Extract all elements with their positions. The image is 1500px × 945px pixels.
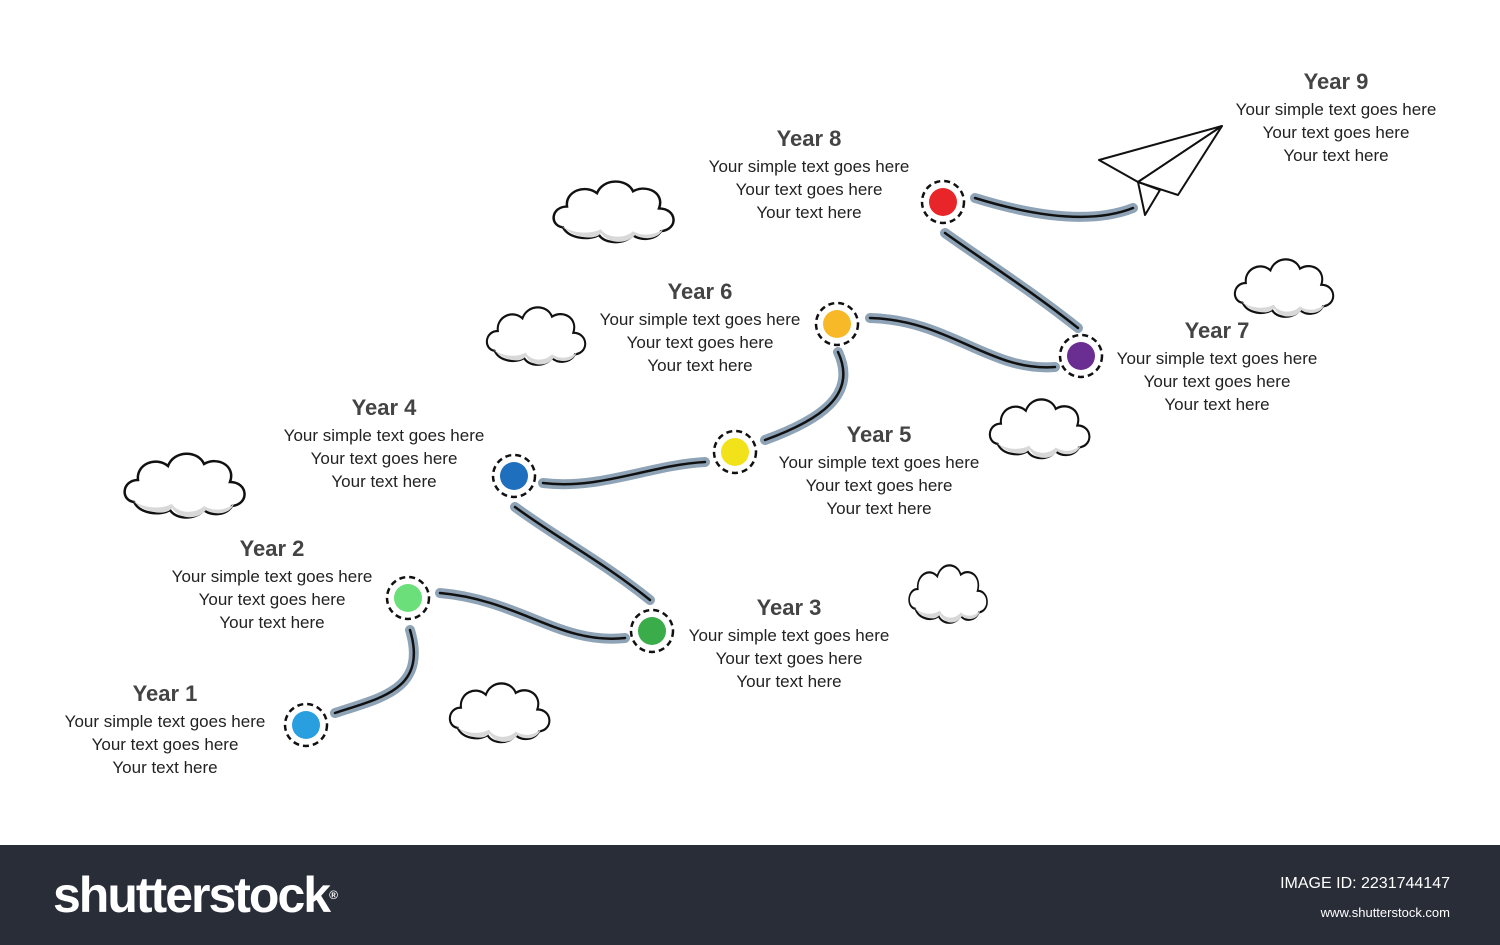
text blocks: Your text goes here — [716, 649, 862, 668]
footer image id: www.shutterstock.com — [1321, 905, 1450, 920]
text blocks: Your text here — [1164, 395, 1270, 414]
text blocks: Your text goes here — [92, 735, 238, 754]
text blocks: Your text goes here — [199, 590, 345, 609]
text blocks: Your text here — [756, 203, 862, 222]
text blocks: Year 4 — [352, 395, 417, 420]
text blocks: Year 1 — [133, 681, 197, 706]
text blocks: Year 3 — [757, 595, 821, 620]
text blocks: Your text goes here — [311, 449, 457, 468]
icon: paper plane — [1099, 126, 1222, 215]
text blocks: Year 5 — [847, 422, 911, 447]
text blocks: Your text here — [1283, 146, 1389, 165]
text blocks: Your simple text goes here — [172, 567, 372, 586]
text blocks: Your text goes here — [627, 333, 773, 352]
text blocks — [65, 69, 1436, 777]
text blocks: Your text here — [647, 356, 753, 375]
text blocks: Your simple text goes here — [689, 626, 889, 645]
text blocks: Your text here — [331, 472, 437, 491]
text blocks: Your simple text goes here — [284, 426, 484, 445]
text blocks: Your text goes here — [1144, 372, 1290, 391]
text blocks: Your simple text goes here — [1117, 349, 1317, 368]
text blocks: Your simple text goes here — [600, 310, 800, 329]
text blocks: Your text here — [219, 613, 325, 632]
text blocks: Your simple text goes here — [65, 712, 265, 731]
text blocks: Year 7 — [1185, 318, 1249, 343]
text blocks: Year 8 — [777, 126, 841, 151]
text blocks: Year 2 — [240, 536, 304, 561]
text blocks: Year 6 — [668, 279, 732, 304]
text blocks: Your text goes here — [806, 476, 952, 495]
footer image id — [1280, 875, 1450, 920]
text blocks: Year 9 — [1304, 69, 1368, 94]
nodes — [285, 181, 1102, 746]
clouds — [125, 182, 1333, 742]
text blocks: Your text goes here — [736, 180, 882, 199]
text blocks: Your text goes here — [1263, 123, 1409, 142]
text blocks: Your text here — [112, 758, 218, 777]
footer logo: shutterstock® — [53, 867, 336, 923]
text blocks: Your simple text goes here — [1236, 100, 1436, 119]
text blocks: Your text here — [826, 499, 932, 518]
text blocks: Your text here — [736, 672, 842, 691]
road connectors — [335, 198, 1133, 713]
text blocks: Your simple text goes here — [709, 157, 909, 176]
footer bar — [0, 845, 1500, 945]
footer image id: IMAGE ID: 2231744147 — [1280, 875, 1450, 892]
text blocks: Your simple text goes here — [779, 453, 979, 472]
